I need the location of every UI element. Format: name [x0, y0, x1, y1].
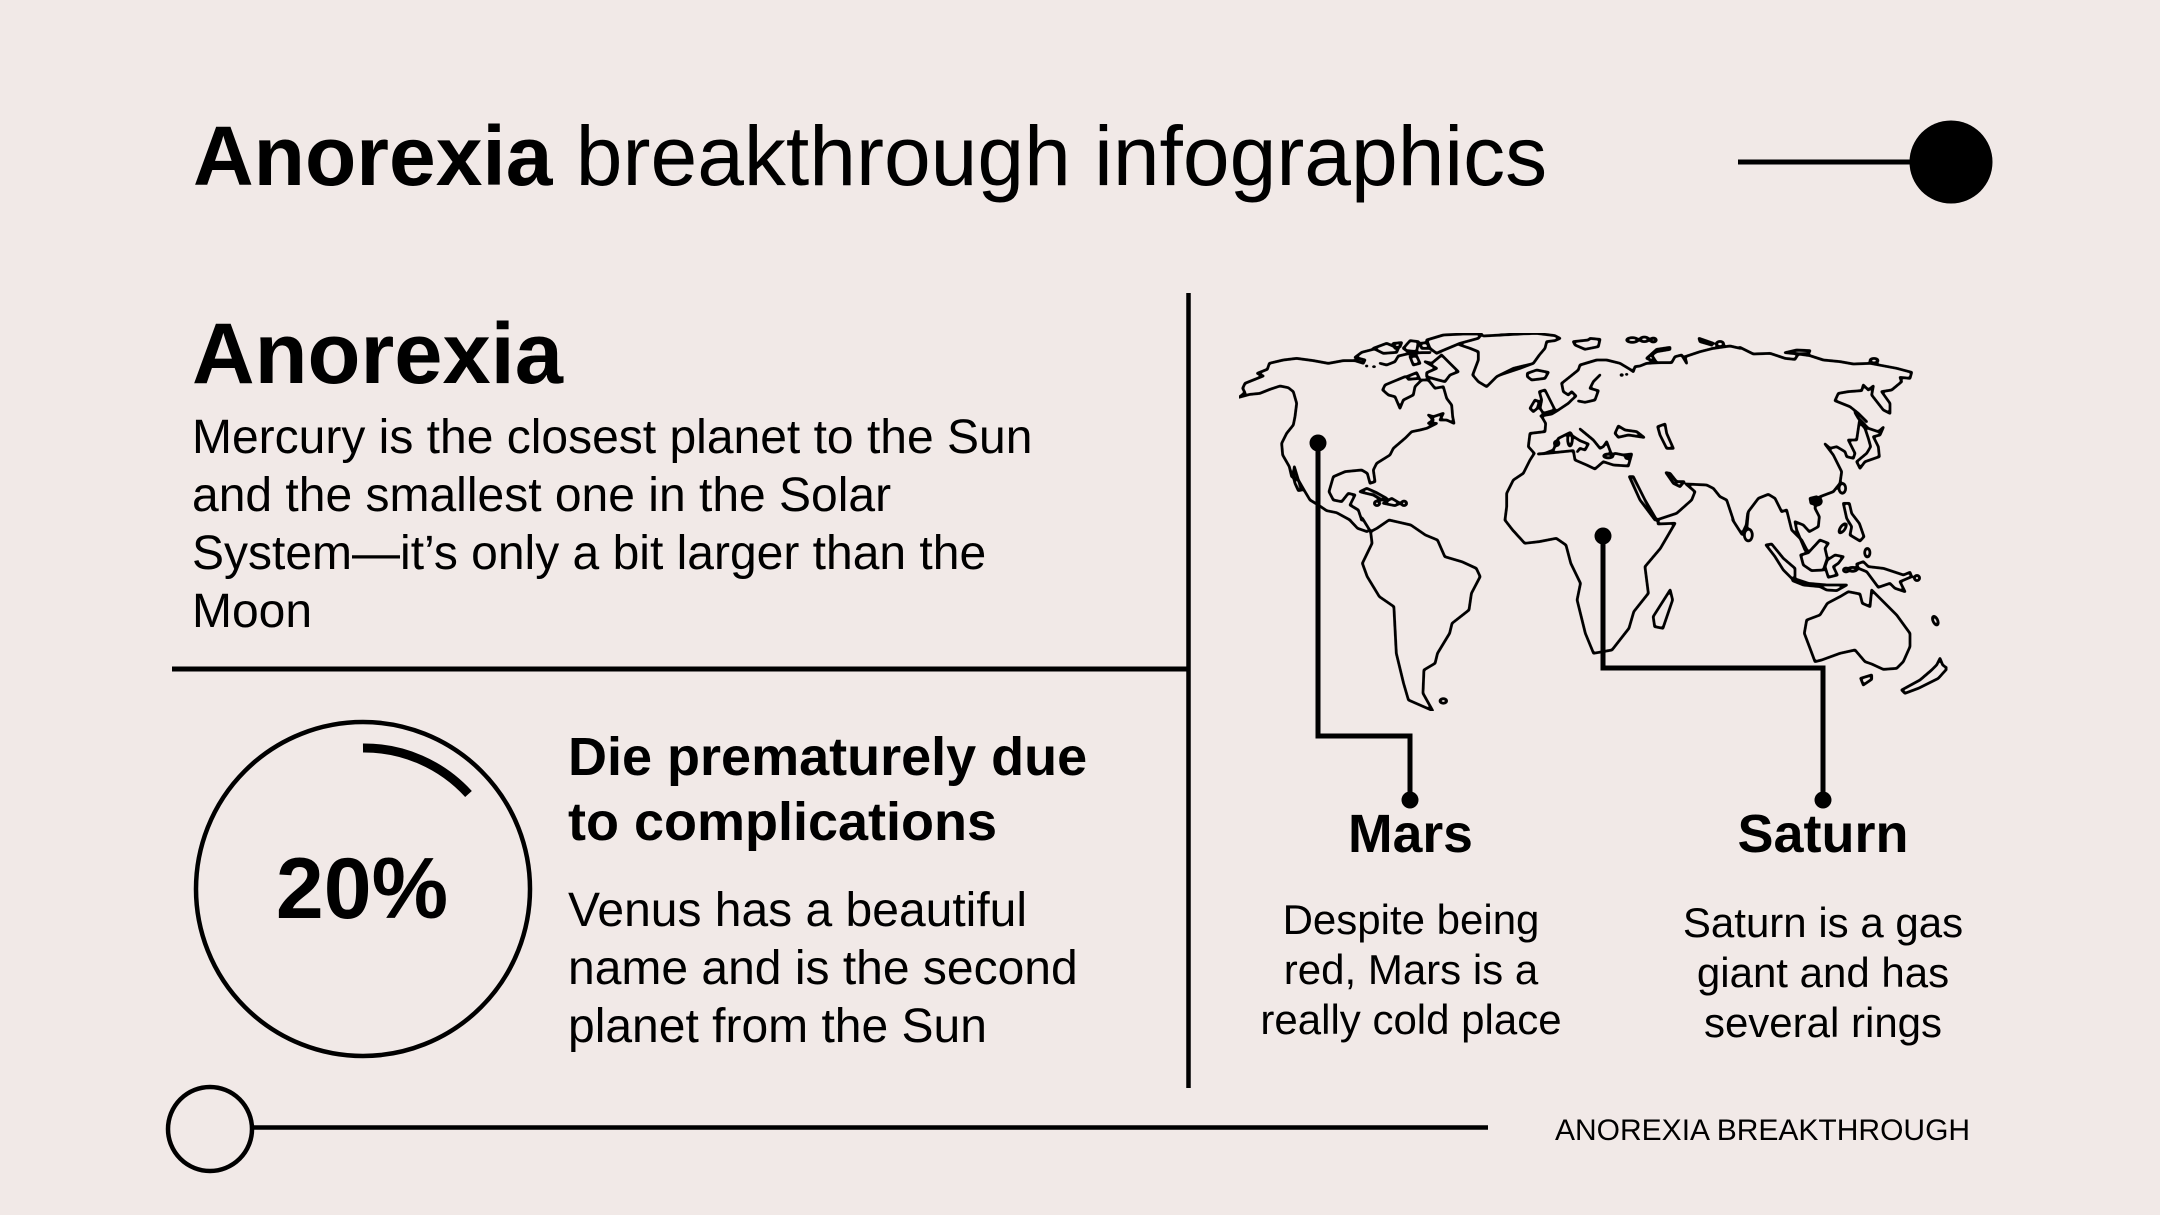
panel: Mars	[1260, 805, 1562, 1043]
text block: Saturn description: Saturn is a gas	[1683, 899, 1963, 946]
text block: venus: Venus has a beautiful	[568, 884, 1027, 937]
text block: venus: name and is the second	[568, 942, 1078, 995]
text block: intro paragraph: System—it’s only a bit larger than the	[192, 527, 986, 580]
icon: header line with filled circle	[1738, 120, 1992, 204]
text block: Saturn description: giant and has	[1697, 949, 1949, 996]
panel: Saturn	[1683, 804, 1963, 1046]
world map	[1239, 333, 1947, 711]
text block: Mars description: really cold place	[1260, 996, 1562, 1043]
heading: Mars: Mars	[1348, 805, 1473, 864]
text block: venus: planet from the Sun	[568, 1000, 987, 1053]
panel: 20 percent statistic	[196, 722, 1087, 1056]
number: 20%: 20%	[276, 841, 448, 937]
footer line with open circle	[168, 1087, 1488, 1171]
heading: die prematurely: to complications	[568, 792, 997, 852]
heading: Saturn: Saturn	[1737, 804, 1909, 864]
text block: Mars description: Despite being	[1283, 896, 1539, 943]
text block: intro paragraph: Mercury is the closest planet to the Sun	[192, 411, 1032, 464]
title: Anorexia breakthrough infographics	[193, 109, 1547, 203]
text block: Saturn description: several rings	[1704, 999, 1942, 1046]
connector: Saturn	[1594, 528, 1832, 808]
text block: intro paragraph: Moon	[192, 585, 312, 638]
panel: anorexia intro	[192, 306, 1032, 638]
chart: progress ring	[196, 722, 530, 1056]
text block: Mars description: red, Mars is a	[1284, 946, 1539, 993]
text block: intro paragraph: and the smallest one in the Solar	[192, 469, 891, 522]
connector: Mars	[1310, 434, 1418, 808]
heading: Anorexia: Anorexia	[192, 306, 564, 402]
heading: die prematurely: Die prematurely due	[568, 727, 1087, 787]
footer label: ANOREXIA BREAKTHROUGH	[1555, 1114, 1970, 1147]
